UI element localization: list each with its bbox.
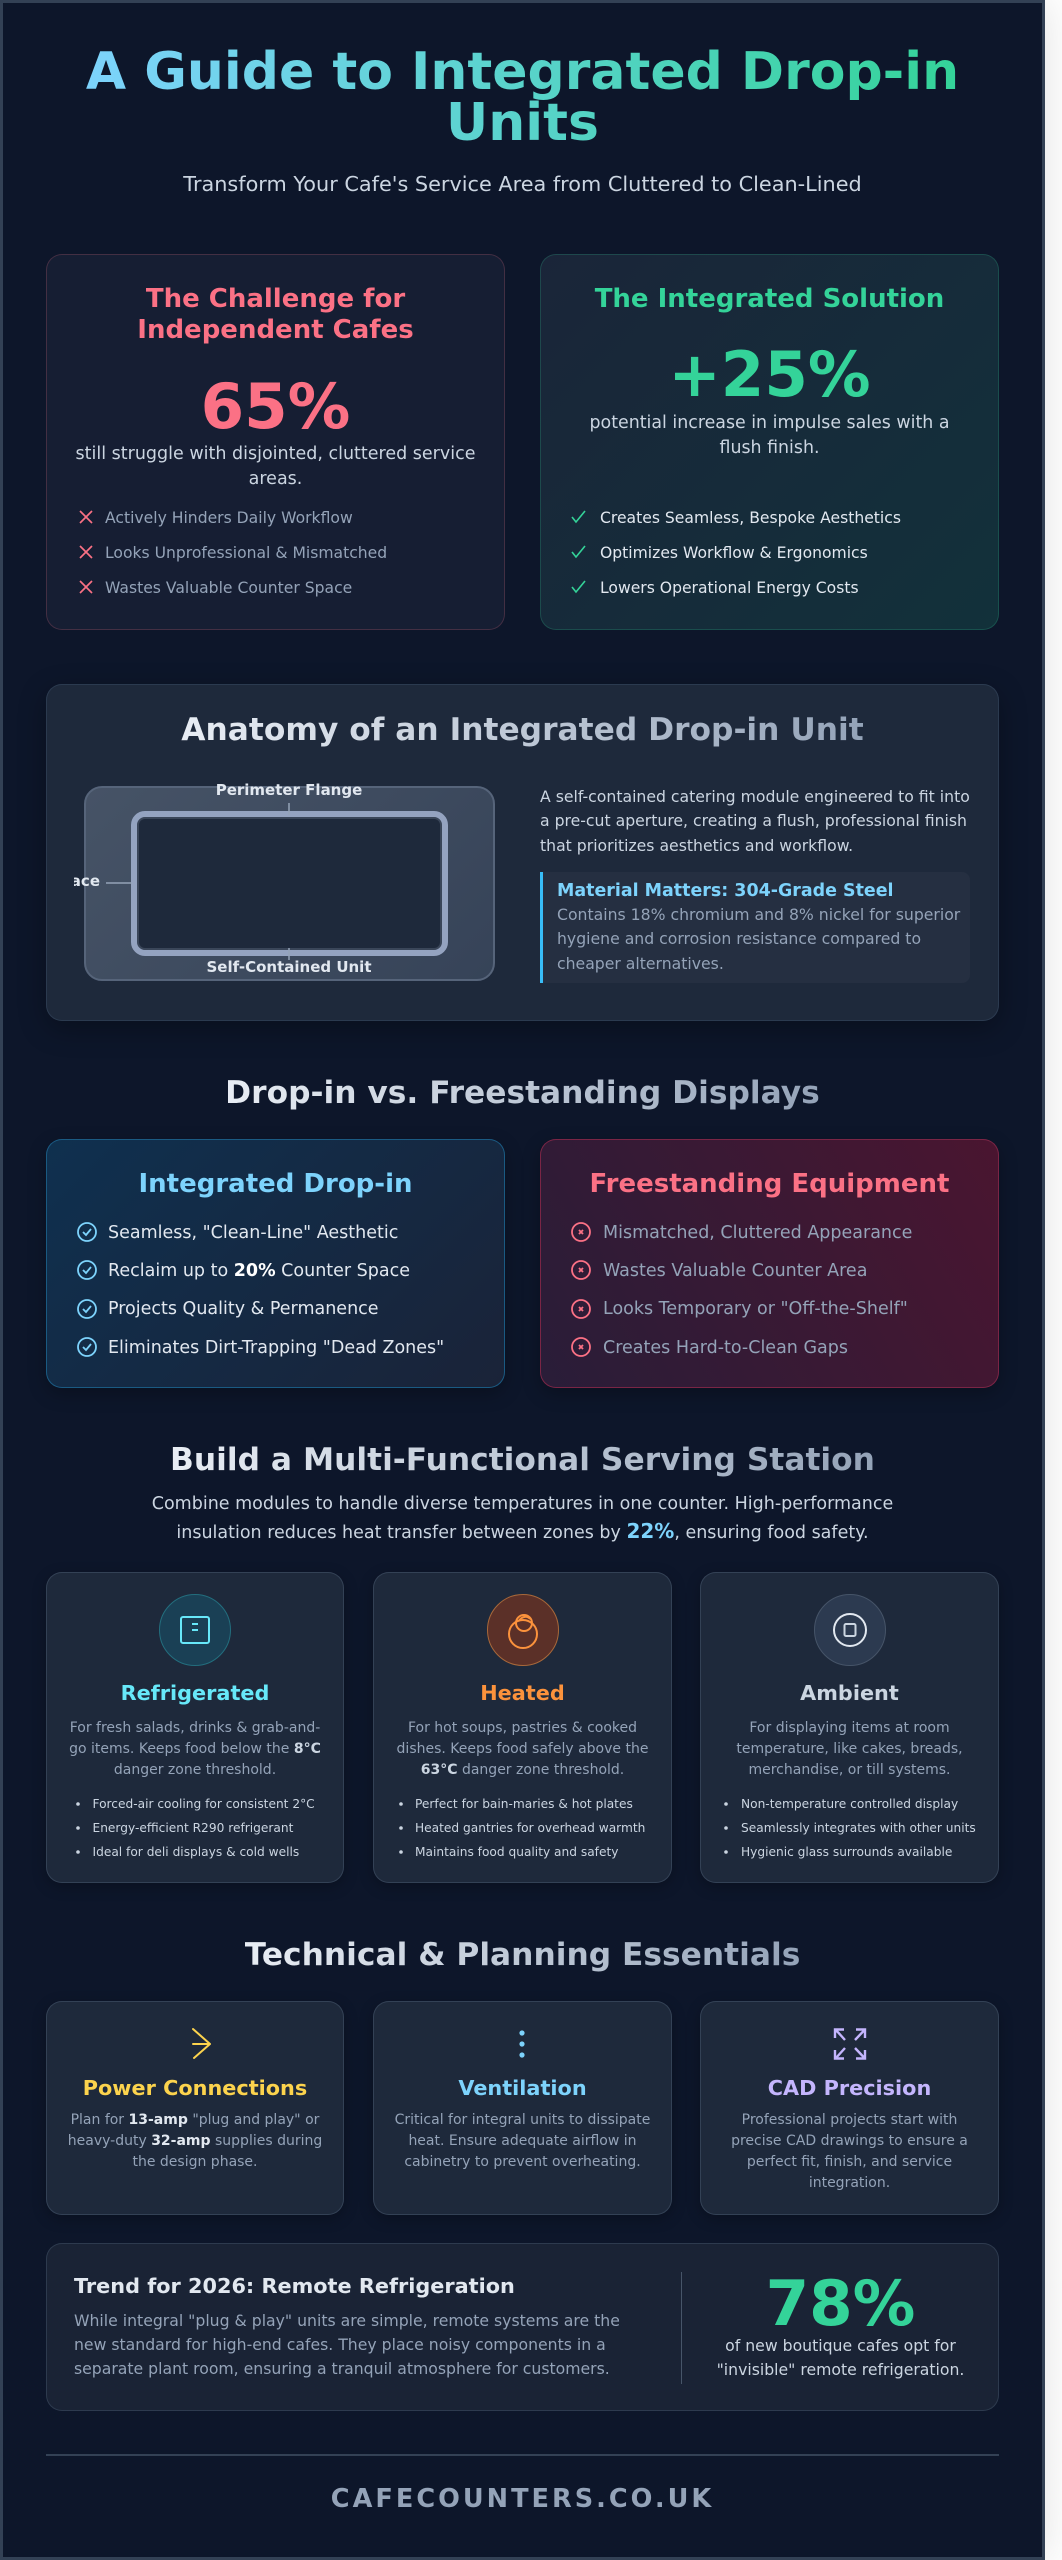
bullet text: Seamlessly integrates with other units: [741, 1821, 976, 1835]
bullet text: Energy-efficient R290 refrigerant: [92, 1821, 293, 1835]
check icons: [572, 510, 586, 594]
icon: power: [192, 2028, 211, 2059]
serving station intro: insulation reduces heat transfer between zones by 22%, ensuring food safety.: [176, 1519, 869, 1543]
bullet text: Forced-air cooling for consistent 2°C: [92, 1797, 315, 1811]
trend stat caption: of new boutique cafes opt for: [725, 2336, 956, 2355]
ventilation description: cabinetry to prevent overheating.: [404, 2154, 641, 2170]
panel: freestanding: [540, 1139, 999, 1388]
trend heading: Trend for 2026: Remote Refrigeration: [74, 2274, 515, 2298]
challenge description: areas.: [249, 469, 302, 489]
label: perimeter flange: Perimeter Flange: [216, 781, 362, 799]
icon circle: [814, 1594, 886, 1666]
solution items: Lowers Operational Energy Costs: [600, 579, 859, 597]
freestanding items: [603, 1222, 912, 1358]
bullet text: Heated gantries for overhead warmth: [415, 1821, 645, 1835]
bullet text: Perfect for bain-maries & hot plates: [415, 1797, 633, 1811]
refrigerated description: For fresh salads, drinks & grab-and-: [70, 1720, 320, 1736]
power description: [68, 2112, 322, 2170]
solution items: Creates Seamless, Bespoke Aesthetics: [600, 509, 901, 527]
ventilation description: [373, 2110, 672, 2172]
icon: cad: [834, 2028, 866, 2060]
refrigerated description: go items. Keeps food below the 8°C: [69, 1740, 321, 1756]
serving station intro: Combine modules to handle diverse temperatures in one counter. High-performance: [152, 1494, 893, 1514]
callout heading: Material Matters: 304-Grade Steel: [557, 881, 894, 901]
anatomy description: that prioritizes aesthetics and workflow.: [540, 836, 853, 855]
icon: ventilation: [518, 2029, 526, 2059]
serving station intro: [152, 1494, 893, 1543]
bullet text: [415, 1797, 645, 1859]
panel: trend 2026: [46, 2243, 999, 2411]
anatomy heading: Anatomy of an Integrated Drop-in Unit: [181, 712, 864, 748]
drop-in items: Projects Quality & Permanence: [108, 1299, 379, 1319]
callout text: hygiene and corrosion resistance compared to: [557, 929, 921, 948]
trend text: While integral "plug & play" units are simple, remote systems are the: [74, 2310, 620, 2330]
ambient description: temperature, like cakes, breads,: [736, 1740, 963, 1756]
trend text: separate plant room, ensuring a tranquil atmosphere for customers.: [74, 2359, 610, 2378]
heated heading: Heated: [480, 1681, 565, 1705]
bullets: [399, 1802, 403, 1854]
callout: material matters: [540, 872, 970, 983]
refrigerated description: danger zone threshold.: [114, 1762, 276, 1778]
freestanding items: Creates Hard-to-Clean Gaps: [603, 1338, 848, 1358]
anatomy description: a pre-cut aperture, creating a flush, professional finish: [540, 811, 967, 830]
cad description: precise CAD drawings to ensure a: [731, 2132, 968, 2148]
solution description: potential increase in impulse sales with a: [590, 413, 949, 433]
heading: drop-in vs freestanding: Drop-in vs. Freestanding Displays: [225, 1075, 820, 1111]
heated description: 63°C danger zone threshold.: [421, 1762, 624, 1778]
power description: the design phase.: [132, 2154, 258, 2170]
icon: fridge: [159, 1594, 231, 1666]
panel: ventilation: [373, 2001, 672, 2215]
heated description: dishes. Keeps food safely above the: [397, 1740, 648, 1756]
ambient description: [736, 1720, 963, 1778]
cad description: [700, 2110, 999, 2194]
drop-in items: Eliminates Dirt-Trapping "Dead Zones": [108, 1338, 444, 1358]
panel: refrigerated: [46, 1572, 344, 1883]
bullet text: Maintains food quality and safety: [415, 1845, 618, 1859]
trend text: new standard for high-end cafes. They place noisy components in a: [74, 2335, 606, 2354]
drop-in items: [108, 1222, 444, 1358]
cad description: integration.: [809, 2174, 890, 2190]
panel: heated: [373, 1572, 672, 1883]
callout text: cheaper alternatives.: [557, 954, 724, 973]
cross circle icons: [571, 1222, 591, 1357]
freestanding items: Mismatched, Cluttered Appearance: [603, 1222, 912, 1242]
challenge items: Actively Hinders Daily Workflow: [105, 509, 353, 527]
freestanding items: Looks Temporary or "Off-the-Shelf": [603, 1299, 908, 1319]
challenge items: Looks Unprofessional & Mismatched: [105, 544, 387, 562]
icon circle: [159, 1594, 231, 1666]
bullet text: Non-temperature controlled display: [741, 1797, 958, 1811]
trend divider: [681, 2272, 682, 2384]
solution description: flush finish.: [719, 438, 820, 458]
trend stat: [682, 2243, 999, 2411]
cad description: perfect fit, finish, and service: [747, 2154, 952, 2170]
heated bullets: [399, 1797, 645, 1859]
solution heading: The Integrated Solution: [595, 284, 944, 314]
solution items: [600, 509, 901, 597]
anatomy description: A self-contained catering module engineered to fit into: [540, 787, 970, 806]
challenge heading: Independent Cafes: [137, 314, 414, 344]
solution list: [572, 509, 901, 597]
challenge description: still struggle with disjointed, cluttered service: [76, 444, 475, 464]
ambient heading: Ambient: [800, 1681, 899, 1705]
refrigerated description: [69, 1720, 321, 1778]
callout text: [557, 905, 960, 973]
bullets: [76, 1802, 80, 1854]
ambient description: merchandise, or till systems.: [748, 1762, 951, 1778]
trend number: 78%: [766, 2267, 915, 2340]
panel: power connections: [46, 2001, 344, 2215]
subtitle: Transform Your Cafe's Service Area from Cluttered to Clean-Lined: [183, 172, 862, 196]
solution items: Optimizes Workflow & Ergonomics: [600, 544, 868, 562]
title: [86, 42, 959, 153]
ventilation description: Critical for integral units to dissipate: [395, 2112, 650, 2128]
heated description: [397, 1720, 648, 1778]
refrigerated heading: Refrigerated: [121, 1681, 269, 1705]
bullets: [724, 1802, 728, 1854]
power description: heavy-duty 32-amp supplies during: [68, 2132, 322, 2148]
challenge stat: 65%: [201, 370, 350, 443]
title: A Guide to Integrated Drop-in: [86, 42, 959, 102]
title: Units: [446, 93, 599, 153]
panel: solution: [540, 254, 999, 630]
freestanding items: Wastes Valuable Counter Area: [603, 1261, 867, 1281]
challenge heading: [137, 284, 414, 344]
leader lines: [106, 803, 290, 960]
diagram: drop-in unit: [74, 781, 495, 981]
refrigerated bullets: [76, 1797, 315, 1859]
ambient bullets: [724, 1797, 976, 1859]
anatomy description: [540, 787, 970, 855]
ventilation description: heat. Ensure adequate airflow in: [408, 2132, 637, 2148]
footer brand: CAFECOUNTERS.CO.UK: [331, 2484, 714, 2514]
power heading: Power Connections: [83, 2076, 307, 2100]
panel: cad precision: [700, 2001, 999, 2215]
panel: integrated drop-in: [46, 1139, 505, 1388]
heated description: For hot soups, pastries & cooked: [408, 1720, 637, 1736]
drop-in items: Reclaim up to 20% Counter Space: [108, 1261, 410, 1281]
panel: ambient: [700, 1572, 999, 1883]
icon circle: [486, 1594, 558, 1666]
solution description: [590, 413, 949, 458]
footer rule: [46, 2454, 999, 2456]
icon: ambient: [814, 1594, 886, 1666]
counter surface: [84, 786, 495, 981]
solution stat: +25%: [668, 338, 871, 411]
bullet text: [92, 1797, 315, 1859]
panel: challenge: [46, 254, 505, 630]
freestanding heading: Freestanding Equipment: [590, 1169, 949, 1199]
challenge heading: The Challenge for: [146, 284, 405, 314]
icon: heated: [487, 1594, 559, 1666]
challenge items: Wastes Valuable Counter Space: [105, 579, 352, 597]
ventilation heading: Ventilation: [458, 2076, 587, 2100]
check circle icons: [77, 1222, 97, 1357]
challenge list: [80, 509, 387, 597]
drop-in heading: Integrated Drop-in: [138, 1169, 413, 1199]
trend stat caption: [682, 2334, 999, 2383]
power description: Plan for 13-amp "plug and play" or: [71, 2112, 319, 2128]
drop-in items: Seamless, "Clean-Line" Aesthetic: [108, 1222, 398, 1242]
heading: technical essentials: Technical & Planning Essentials: [245, 1937, 800, 1973]
ambient description: For displaying items at room: [749, 1720, 950, 1736]
callout text: Contains 18% chromium and 8% nickel for superior: [557, 905, 960, 924]
unit flange: [131, 811, 448, 956]
cross icons: [80, 510, 92, 594]
panel: anatomy: [46, 684, 999, 1021]
challenge description: [76, 444, 475, 489]
trend stat caption: "invisible" remote refrigeration.: [717, 2360, 964, 2379]
trend text: [74, 2308, 620, 2381]
cad heading: CAD Precision: [768, 2076, 931, 2100]
label: self-contained unit: Self-Contained Unit: [206, 958, 372, 976]
cad description: Professional projects start with: [742, 2112, 957, 2128]
bullet text: Hygienic glass surrounds available: [741, 1845, 952, 1859]
bullet text: Ideal for deli displays & cold wells: [92, 1845, 299, 1859]
bullet text: [741, 1797, 976, 1859]
challenge items: [105, 509, 387, 597]
heading: serving station: Build a Multi-Functional Serving Station: [170, 1442, 875, 1478]
